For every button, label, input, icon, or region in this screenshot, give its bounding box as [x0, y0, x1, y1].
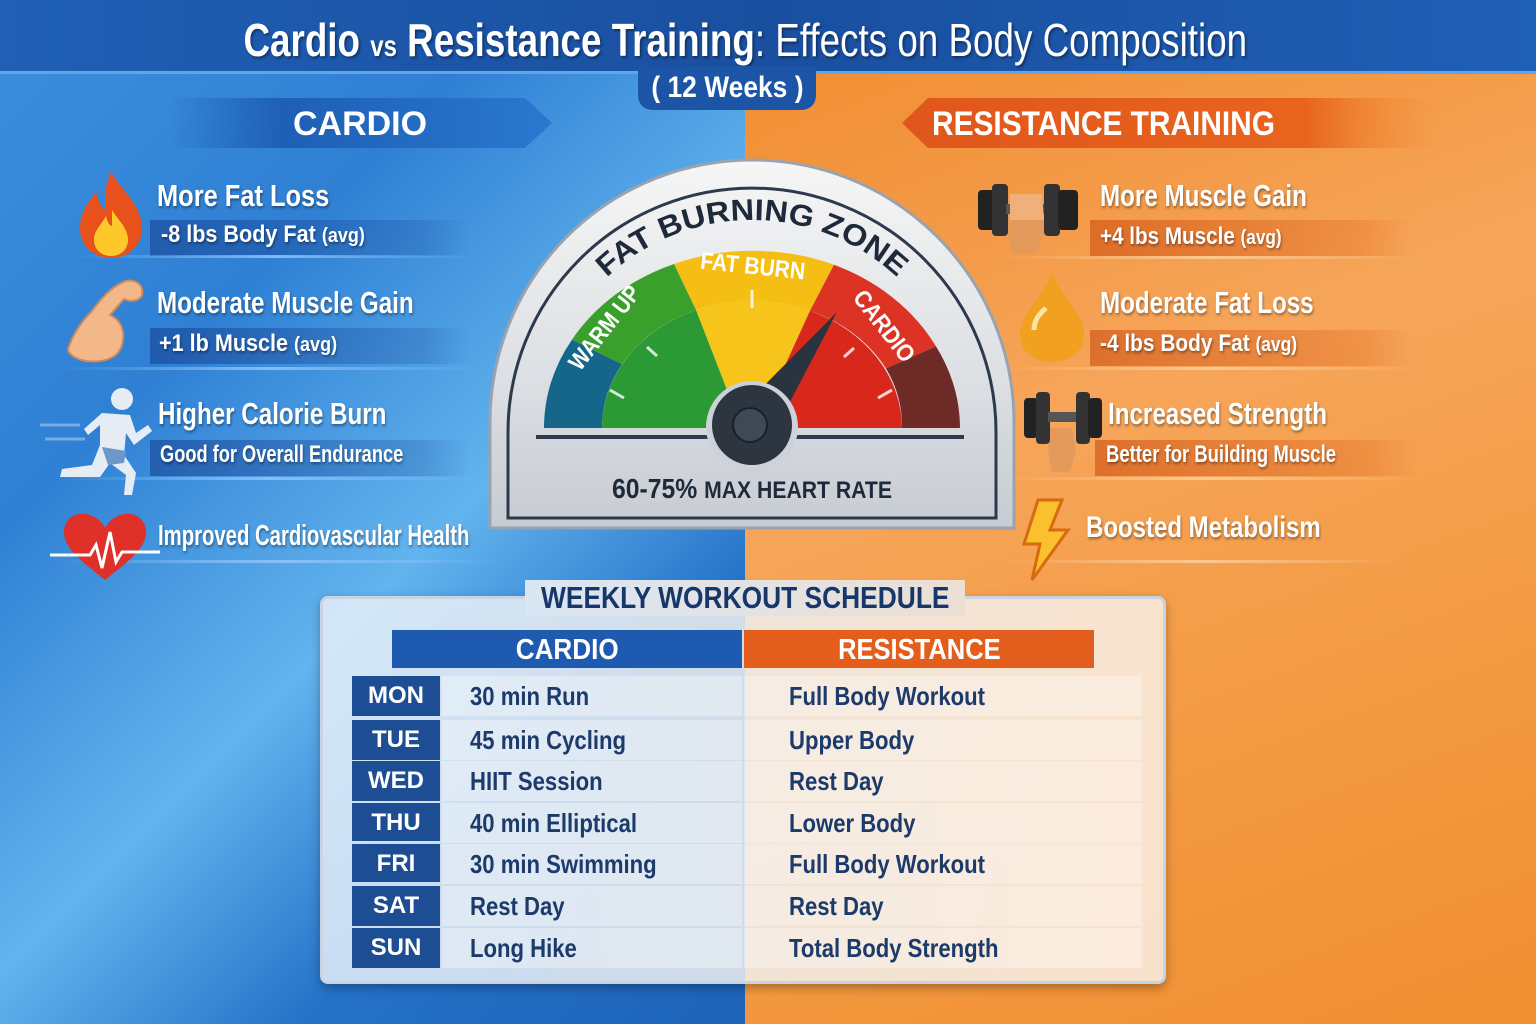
item: more fat loss [157, 178, 366, 250]
schedule rows: Full Body Workout [789, 681, 985, 711]
icon: flexed arm [67, 280, 144, 362]
item: increased strength: Increased Strength [1108, 396, 1327, 431]
item: higher calorie burn: Higher Calorie Burn [158, 396, 386, 431]
item: moderate muscle gain: Moderate Muscle Gain [157, 285, 414, 320]
schedule rows: 45 min Cycling [470, 725, 626, 755]
gauge caption: 60-75% MAX HEART RATE [612, 473, 892, 504]
schedule rows: Long Hike [470, 933, 577, 963]
subtitle: 12 weeks [638, 66, 816, 110]
schedule rows: MON [368, 682, 424, 709]
schedule rows: Rest Day [789, 766, 884, 796]
schedule rows: HIIT Session [470, 766, 603, 796]
schedule rows: THU [371, 809, 421, 836]
title: Cardio vs Resistance Training: Effects on Body Composition [243, 14, 1247, 66]
schedule rows: 30 min Swimming [470, 849, 657, 879]
banner: cardio: CARDIO [293, 105, 427, 143]
schedule rows: FRI [377, 850, 415, 877]
schedule rows: Full Body Workout [789, 849, 985, 879]
item: higher calorie burn: Good for Overall Endurance [160, 441, 403, 468]
schedule rows: Upper Body [789, 725, 914, 755]
gauge: fat burning zone: CARDIO [847, 285, 920, 368]
schedule rows: Rest Day [789, 891, 884, 921]
gauge title: FAT BURNING ZONE [594, 199, 910, 276]
icon: flame [80, 172, 142, 258]
column header: cardio: CARDIO [516, 634, 618, 666]
icon: lightning [1022, 498, 1071, 581]
item: more muscle gain [1100, 178, 1308, 252]
schedule rows: SAT [373, 892, 419, 919]
panel: weekly workout schedule [320, 596, 1166, 984]
item: more muscle gain: +4 lbs Muscle (avg) [1100, 223, 1282, 250]
schedule rows: WED [368, 767, 424, 794]
icon: dumbbell in hand [978, 184, 1078, 254]
schedule rows: TUE [372, 726, 420, 753]
schedule rows [352, 676, 1142, 968]
schedule rows: Total Body Strength [789, 933, 999, 963]
schedule rows: Lower Body [789, 808, 915, 838]
column header: cardio [392, 630, 742, 668]
item: more muscle gain: More Muscle Gain [1100, 178, 1307, 213]
gauge needle [732, 312, 837, 440]
column header: resistance [744, 630, 1094, 668]
icon: dumbbell [1024, 392, 1102, 472]
schedule rows: 40 min Elliptical [470, 808, 637, 838]
banner: resistance training [902, 98, 1408, 148]
icon: runner [40, 388, 152, 495]
item: increased strength [1106, 396, 1338, 470]
schedule rows: 30 min Run [470, 681, 589, 711]
schedule rows: Rest Day [470, 891, 565, 921]
banner: resistance training: RESISTANCE TRAINING [932, 105, 1275, 143]
banner: cardio [194, 98, 552, 148]
item: more fat loss: -8 lbs Body Fat (avg) [161, 221, 365, 248]
column header: resistance: RESISTANCE [838, 634, 1000, 666]
item: moderate muscle gain: +1 lb Muscle (avg) [159, 330, 337, 357]
item: moderate fat loss: Moderate Fat Loss [1100, 285, 1314, 320]
item: more fat loss: More Fat Loss [157, 178, 329, 213]
item: higher calorie burn [158, 396, 405, 468]
item: boosted metabolism: Boosted Metabolism [1086, 511, 1321, 544]
schedule rows: SUN [371, 934, 421, 961]
item: moderate muscle gain [157, 285, 414, 358]
title [0, 0, 1536, 74]
schedule heading: WEEKLY WORKOUT SCHEDULE [541, 580, 949, 615]
icon: heart with pulse [50, 514, 160, 580]
gauge: fat burning zone: FAT BURN [699, 248, 806, 285]
gauge zone labels: WARM UP [563, 280, 646, 376]
icon: drop [1020, 272, 1084, 362]
gauge: fat burning zone [488, 158, 1016, 530]
item: increased strength: Better for Building Muscle [1106, 441, 1336, 468]
item: moderate fat loss [1100, 285, 1315, 360]
subtitle: 12 weeks: ( 12 Weeks ) [651, 71, 803, 104]
item: improved cardiovascular health: Improved Cardiovascular Health [158, 520, 469, 552]
item: moderate fat loss: -4 lbs Body Fat (avg) [1100, 330, 1297, 357]
